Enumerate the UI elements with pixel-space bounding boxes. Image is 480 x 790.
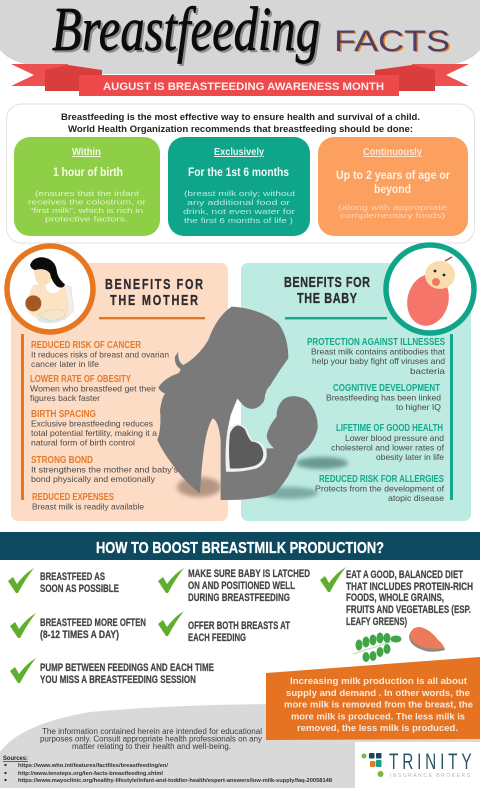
card: exclusively 6 months xyxy=(168,137,310,236)
benefit: expenses xyxy=(32,491,144,512)
checklist: pump between feedings: YOU MISS A BREASTFEEDING SESSION xyxy=(40,674,196,686)
heading: benefits for the baby xyxy=(284,273,370,306)
benefit: cancer xyxy=(31,339,169,369)
icon: leafy greens xyxy=(353,632,402,662)
card: continuously 2 years: beyond xyxy=(374,182,411,196)
sources list: Sources: xyxy=(3,755,28,762)
callout: supply and demand xyxy=(266,657,480,740)
benefit: bond: It strengthens the mother and baby's xyxy=(31,464,178,474)
card: exclusively 6 months: For the 1st 6 months xyxy=(188,165,289,179)
benefit: cognitive xyxy=(326,382,441,412)
footer grey curve xyxy=(0,704,480,788)
icon: salmon steak xyxy=(409,627,445,652)
title: FACTS: FACTS xyxy=(334,25,450,58)
section banner: how to boost production: HOW TO BOOST BREASTMILK PRODUCTION? xyxy=(96,540,384,557)
checklist: offer both breasts: EACH FEEDING xyxy=(188,632,246,644)
benefit: birth spacing: natural form of birth control xyxy=(31,438,135,448)
icon: mother nursing in orange ring xyxy=(7,246,93,332)
card: within 1 hour: (ensures that the infant xyxy=(35,189,140,198)
sources list xyxy=(3,755,332,784)
header: grey banner with title xyxy=(0,0,480,74)
benefit: birth spacing xyxy=(31,408,157,448)
checklist: balanced diet xyxy=(320,567,473,628)
benefit: lifetime health xyxy=(331,422,445,462)
benefit: bond: STRONG BOND xyxy=(31,454,93,466)
sources list: https://www.who.int/features/factfiles/breastfeeding/en/ xyxy=(18,763,169,769)
benefit: cognitive: COGNITIVE DEVELOPMENT xyxy=(333,382,440,394)
callout: supply and demand: removed, the less milk is produced. xyxy=(297,723,458,733)
benefit: cancer: REDUCED RISK OF CANCER xyxy=(31,339,141,351)
sources list: https://www.mayoclinic.org/healthy-lifestyle/infant-and-toddler-health/expert-answers/low-milk-supply/faq-20058148 xyxy=(18,778,332,784)
checklist: latch and position: MAKE SURE BABY IS LATCHED xyxy=(188,568,310,580)
card: within 1 hour: Within xyxy=(72,147,101,158)
disclaimer text: matter relating to their health and well-being. xyxy=(72,742,231,751)
checklist: pump between feedings xyxy=(10,658,214,686)
section banner: how to boost production xyxy=(0,532,480,560)
logo mark xyxy=(362,753,384,777)
checklist: balanced diet: LEAFY GREENS) xyxy=(346,616,407,628)
icon: swaddled baby in teal ring xyxy=(386,245,474,333)
card: within 1 hour: protective factors. xyxy=(45,214,128,224)
benefit: illnesses: Breast milk contains antibodies that xyxy=(311,346,446,356)
ribbon banner xyxy=(11,64,469,96)
intro text xyxy=(61,112,420,135)
card: exclusively 6 months: Exclusively xyxy=(214,147,264,158)
benefit: allergies xyxy=(315,473,445,503)
benefit: lifetime health: cholesterol and lower rates of xyxy=(331,442,445,452)
card: exclusively 6 months: the first 6 months of life ) xyxy=(184,216,294,225)
title: Breastfeeding: Breastfeeding xyxy=(54,0,322,66)
benefit: cancer: cancer later in life xyxy=(31,359,99,369)
logo: Trinity Insurance Brokers: INSURANCE BROKERS xyxy=(390,773,471,779)
callout: supply and demand: more milk is removed from the breast, the xyxy=(284,700,473,710)
heading: benefits for the mother: BENEFITS FOR xyxy=(105,275,203,292)
checklist: breastfeed more often: (8-12 TIMES A DAY) xyxy=(40,629,119,641)
benefit: allergies: Protects from the development of xyxy=(315,484,445,494)
card: continuously 2 years: complementary foods) xyxy=(340,211,446,220)
benefit: birth spacing: BIRTH SPACING xyxy=(31,408,96,420)
checklist: latch and position: ON AND POSITIONED WELL xyxy=(188,580,295,592)
benefit: cognitive: Breastfeeding has been linked xyxy=(326,392,441,402)
card: exclusively 6 months: drink, not even water for xyxy=(183,207,296,216)
benefit: cancer: It reduces risks of breast and ovarian xyxy=(31,350,169,360)
disclaimer text: purposes only. Consult appropriate health professionals on any xyxy=(40,734,262,744)
checklist: breastfeed more often xyxy=(10,613,146,641)
panel: WHO recommendations xyxy=(6,104,474,243)
panel: benefits for the mother xyxy=(11,263,228,521)
intro text: World Health Organization recommends that breastfeeding should be done: xyxy=(68,124,413,135)
checklist: balanced diet: FOODS, WHOLE GRAINS, xyxy=(346,592,444,604)
callout: supply and demand: supply and demand . In other words, the xyxy=(286,688,470,698)
card: continuously 2 years: (along with appropriate xyxy=(338,203,447,212)
benefit: allergies: atopic disease xyxy=(388,493,444,503)
intro text: Breastfeeding is the most effective way to ensure health and survival of a child. xyxy=(61,112,420,123)
benefit: bond xyxy=(31,454,178,484)
heading: benefits for the mother xyxy=(105,275,203,308)
ribbon text: AUGUST IS BREASTFEEDING AWARENESS MONTH xyxy=(103,81,384,93)
checklist: breastfeed as soon as possible: SOON AS POSSIBLE xyxy=(40,583,119,595)
benefit: obesity: figures back faster xyxy=(30,393,100,403)
benefit: lifetime health: LIFETIME OF GOOD HEALTH xyxy=(336,422,443,434)
heading: benefits for the baby: THE BABY xyxy=(297,289,357,306)
benefit: illnesses: help your baby fight off viruses and xyxy=(312,356,445,366)
callout: supply and demand: more milk is produced. The less milk is xyxy=(291,712,465,722)
sources list: http://www.tensteps.org/ten-facts-breastfeeding.shtml xyxy=(18,771,164,777)
silhouette: mother and baby with heart xyxy=(157,307,348,500)
checklist: latch and position: DURING BREASTFEEDING xyxy=(188,592,290,604)
heading: benefits for the mother: THE MOTHER xyxy=(110,291,198,308)
logo: Trinity Insurance Brokers xyxy=(355,742,480,788)
benefit: illnesses xyxy=(307,336,446,376)
callout: supply and demand: Increasing milk production is all about xyxy=(290,676,467,686)
checklist: offer both breasts xyxy=(158,611,290,644)
benefit: obesity xyxy=(30,373,156,403)
logo: Trinity Insurance Brokers: TRINITY xyxy=(389,750,472,775)
benefit: obesity: Women who breastfeed get their xyxy=(30,384,156,394)
card: within 1 hour: 1 hour of birth xyxy=(53,165,123,179)
card: within 1 hour: “first milk”, which is rich in xyxy=(30,206,143,215)
benefit: illnesses: bacteria xyxy=(410,366,445,376)
checklist: breastfeed as soon as possible xyxy=(8,568,119,595)
disclaimer text xyxy=(40,727,262,751)
disclaimer text: The information contained herein are intended for educational xyxy=(42,727,262,736)
card: within 1 hour: receives the colostrum, or xyxy=(28,198,147,206)
card: continuously 2 years xyxy=(318,137,468,236)
checklist: latch and position xyxy=(158,568,310,604)
benefit: lifetime health: Lower blood pressure and xyxy=(345,433,444,443)
card: exclusively 6 months: any additional food or xyxy=(187,198,291,207)
title: FACTS: FACTS xyxy=(336,26,452,59)
card: exclusively 6 months: (breast milk only; without xyxy=(184,189,296,198)
benefit: birth spacing: total potential fertility, making it a xyxy=(31,428,157,438)
benefit: cognitive: to higher IQ xyxy=(396,402,441,412)
checklist: breastfeed as soon as possible: BREASTFEED AS xyxy=(40,571,105,583)
panel: benefits for the baby xyxy=(241,263,471,521)
benefit: birth spacing: Exclusive breastfeeding reduces xyxy=(31,418,153,428)
benefit: obesity: LOWER RATE OF OBESITY xyxy=(30,373,131,385)
benefit: expenses: REDUCED EXPENSES xyxy=(32,491,114,503)
checklist: breastfeed more often: BREASTFEED MORE OFTEN xyxy=(40,617,146,629)
card: within 1 hour xyxy=(14,137,160,236)
heading: benefits for the baby: BENEFITS FOR xyxy=(284,273,370,290)
benefit: lifetime health: obesity later in life xyxy=(376,452,444,462)
checklist: pump between feedings: PUMP BETWEEN FEEDINGS AND EACH TIME xyxy=(40,662,214,674)
card: continuously 2 years: Up to 2 years of age or xyxy=(336,168,450,182)
card: continuously 2 years: Continuously xyxy=(363,147,422,158)
benefit: expenses: Breast milk is readily available xyxy=(32,502,144,512)
benefit: bond: bond physically and emotionally xyxy=(31,474,156,484)
checklist: offer both breasts: OFFER BOTH BREASTS AT xyxy=(188,620,290,632)
